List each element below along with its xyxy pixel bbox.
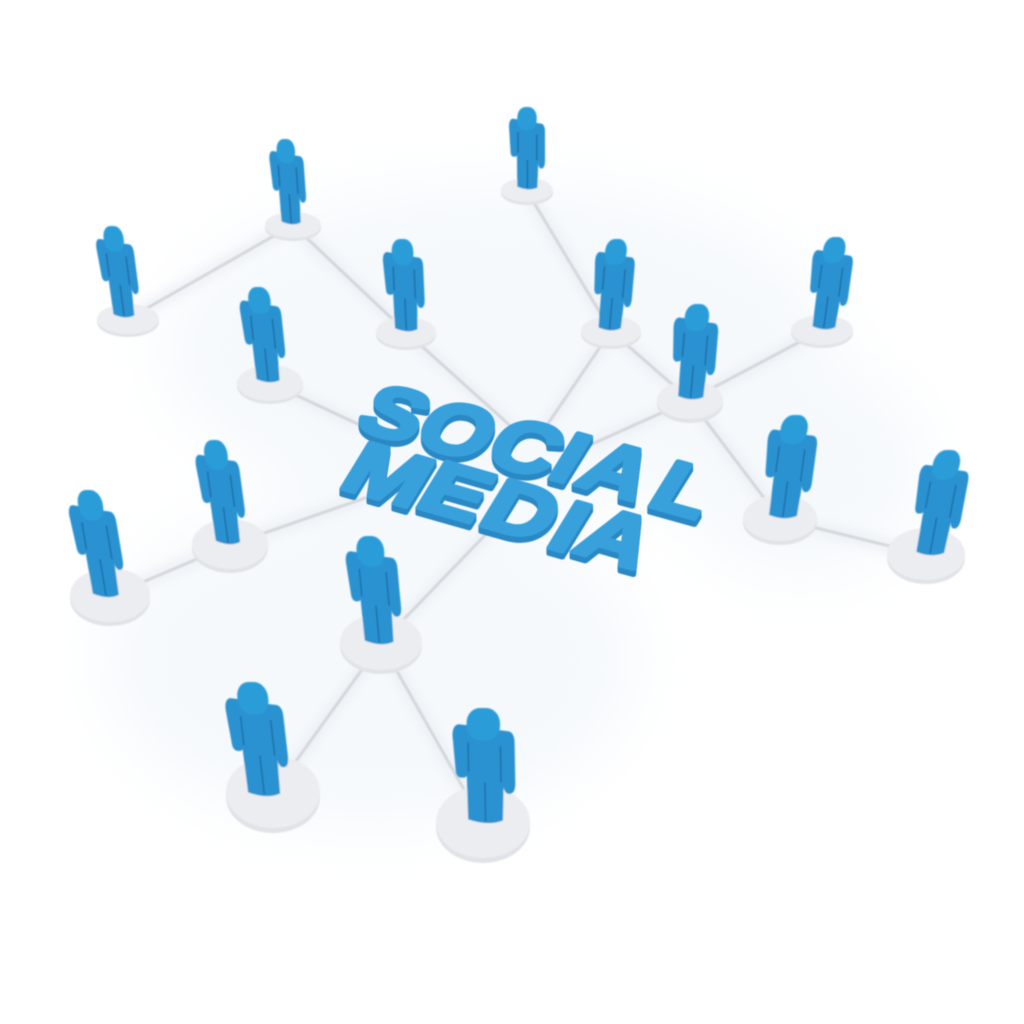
- word: SOCIAL: L: [635, 445, 734, 534]
- word: MEDIA: M: [327, 427, 449, 523]
- person node 14: [222, 682, 320, 833]
- person node 15: [436, 708, 530, 863]
- person node 10: [887, 450, 974, 584]
- person node 12: [65, 490, 150, 626]
- person node 3: [501, 107, 553, 205]
- title: social media 3D lettering: [327, 368, 734, 584]
- person node 4: [376, 239, 436, 350]
- connection lines: [110, 191, 926, 823]
- soft floor shadow: [100, 180, 930, 830]
- word: SOCIAL: I: [535, 417, 605, 498]
- person node 5: [581, 239, 641, 349]
- word: MEDIA: D: [466, 464, 577, 557]
- word: SOCIAL: A: [563, 424, 672, 515]
- word: MEDIA: I: [534, 486, 605, 568]
- word: SOCIAL: C: [472, 401, 581, 492]
- person node 9: [743, 415, 821, 545]
- person node 1: [94, 226, 159, 337]
- word: MEDIA: A: [561, 491, 672, 584]
- person node 13: [340, 536, 422, 674]
- word: SOCIAL: S: [343, 368, 447, 458]
- person node 6: [791, 237, 856, 348]
- person node 2: [265, 139, 321, 241]
- person node 8: [657, 304, 723, 423]
- word: SOCIAL: O: [401, 383, 515, 476]
- word: SOCIAL: [343, 368, 734, 534]
- connection line shadows: [110, 191, 926, 823]
- person node 7: [237, 287, 303, 404]
- word: MEDIA: [327, 427, 672, 584]
- word: MEDIA: E: [403, 446, 509, 538]
- person node 11: [192, 440, 268, 573]
